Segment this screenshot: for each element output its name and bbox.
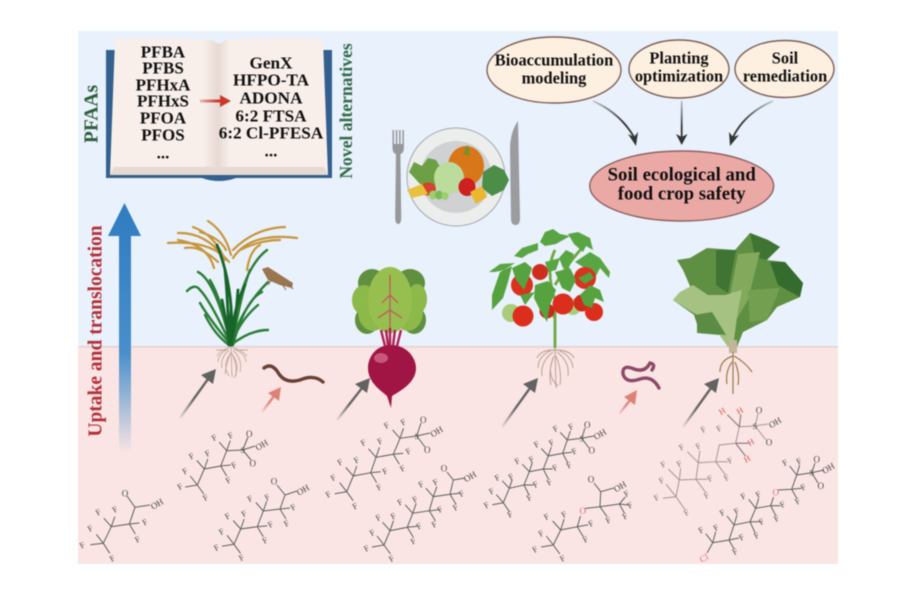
pepper — [458, 178, 476, 196]
icon: knife — [510, 121, 520, 225]
left page — [110, 39, 219, 175]
right page — [219, 39, 328, 175]
plant: tomato — [489, 229, 610, 388]
tomato stem — [542, 245, 585, 348]
tomato foliage back — [489, 229, 610, 278]
arrow: to beet — [337, 378, 370, 420]
molecule: 6:2 Cl-PFESA: Cl — [698, 551, 711, 564]
molecule: PFOA: FFFFFFFFFFFFFFF — [362, 476, 466, 564]
tomato foliage front — [492, 262, 604, 322]
molecule: PFOS: O — [584, 420, 591, 430]
label: Novel alternatives: Novel alternatives — [336, 43, 356, 179]
molecule: 6:2 FTSA: O — [766, 438, 773, 448]
rice panicles — [168, 221, 297, 270]
arrow: to tomato — [502, 378, 538, 427]
molecule: PFHxA-type acid: FFFFFFFFFFF — [212, 491, 298, 563]
molecule: HFPO-DA (GenX): O — [588, 474, 595, 484]
rice roots — [216, 347, 248, 378]
tomato fruits — [532, 264, 548, 280]
list: PFAAs compounds — [136, 42, 191, 162]
beet leaves — [358, 269, 386, 297]
molecule: PFBS: OH — [254, 437, 270, 453]
beet root — [368, 345, 416, 408]
molecule: PFOA: O — [441, 463, 448, 473]
molecule: 6:2 Cl-PFESA: OH — [820, 460, 837, 476]
arrow: to rice — [180, 369, 216, 418]
molecule: 6:2 Cl-PFESA: O — [772, 487, 779, 497]
lettuce roots — [720, 352, 752, 394]
molecule: 6:2 FTSA: O — [756, 406, 763, 416]
panel: sky background — [78, 31, 838, 347]
tomato roots — [537, 348, 574, 388]
list: PFAAs compounds: PFHxS — [137, 92, 189, 110]
beet stems — [381, 328, 401, 346]
oval: Bioaccumulation modeling: Bioaccumulation — [495, 50, 613, 70]
molecule: PFBA: O — [122, 488, 129, 498]
oval: Soil remediation — [735, 40, 834, 98]
molecule: 6:2 FTSA — [652, 405, 784, 518]
molecule: PFBS: O — [246, 429, 253, 439]
molecule: PFBA: OH — [149, 496, 166, 512]
arrow: PFAAs to alternatives — [200, 95, 231, 107]
plant: rice — [168, 221, 297, 378]
arrow: remediation to safety — [729, 101, 773, 146]
molecule: PFHxS: FFFFFFFFFFFFF — [324, 416, 413, 511]
rice leaves — [187, 250, 268, 345]
oval: Planting optimization: Planting — [649, 48, 709, 68]
arrow: planting to safety — [676, 101, 688, 145]
list: novel alternatives: 6:2 Cl-PFESA — [219, 124, 324, 142]
list: PFAAs compounds: PFOA — [140, 108, 187, 128]
tomato — [420, 182, 436, 196]
molecule: 6:2 Cl-PFESA: FFFFFFFFFFFFFFFF — [696, 455, 808, 557]
list: PFAAs compounds: PFBA — [141, 42, 186, 62]
molecule: PFBS: S — [240, 445, 245, 455]
icon: fork — [392, 130, 404, 224]
molecule: 6:2 FTSA: FFFFFFFFFFFFF — [652, 423, 735, 518]
oval: Soil ecological and food crop safety: Soil ecological and — [608, 164, 756, 186]
list: novel alternatives: ... — [265, 142, 277, 160]
list: novel alternatives — [219, 54, 324, 160]
oval: Bioaccumulation modeling — [487, 37, 621, 103]
oval: Planting optimization — [629, 40, 729, 98]
molecule: 6:2 Cl-PFESA: O — [813, 454, 820, 464]
icon: grasshopper — [262, 267, 293, 290]
molecule: HFPO-DA (GenX): FFFFFFFFFFF — [530, 488, 635, 564]
molecule: PFHxS: S — [414, 431, 419, 441]
arrow: to lettuce — [683, 378, 719, 427]
molecule: 6:2 FTSA: S — [753, 421, 758, 431]
molecule: HFPO-DA (GenX): OH — [612, 479, 629, 494]
molecule: PFHxS: O — [424, 445, 431, 455]
icon: open book with compound lists — [106, 39, 332, 181]
lettuce outer leaves — [673, 233, 803, 347]
molecule: 6:2 FTSA: OH — [767, 415, 784, 430]
list: PFAAs compounds: PFBS — [142, 58, 184, 78]
arrow: modeling to safety — [593, 101, 638, 146]
label: Uptake and translocation: Uptake and translocation — [86, 225, 106, 437]
list: novel alternatives: 6:2 FTSA — [235, 106, 307, 126]
molecule: PFOS: FFFFFFFFFFFFFFFFF — [482, 421, 579, 520]
icon: nematode — [623, 363, 659, 388]
molecule: PFHxS: OH — [429, 424, 445, 439]
panel: soil background — [78, 347, 838, 564]
oval: Soil remediation: remediation — [743, 66, 827, 86]
arrow: to earthworm — [262, 387, 281, 412]
molecule: 6:2 Cl-PFESA: O — [817, 481, 824, 491]
soil surface line — [78, 346, 838, 348]
molecule: PFHxA-type acid: OH — [295, 482, 312, 498]
molecule: PFHxA-type acid: O — [271, 477, 278, 487]
molecule: PFBA: FFFFFFF — [78, 504, 150, 564]
lettuce stalk — [729, 340, 737, 353]
oval: Bioaccumulation modeling: modeling — [522, 68, 587, 88]
oval: Soil remediation: Soil — [772, 48, 799, 68]
molecule: 6:2 Cl-PFESA: S — [809, 468, 814, 478]
list: novel alternatives: GenX — [250, 54, 293, 72]
molecule: PFOS: OH — [592, 426, 609, 442]
oval: Soil ecological and food crop safety: food crop safety — [618, 184, 746, 204]
cucumbers — [429, 190, 437, 200]
molecule: PFBS: O — [249, 458, 256, 468]
label: PFAAs: PFAAs — [82, 85, 102, 143]
oval: Planting optimization: optimization — [635, 66, 723, 86]
molecule: PFBS — [175, 429, 270, 503]
arrow: upward blue uptake arrow — [108, 203, 141, 453]
list: PFAAs compounds: PFOS — [141, 126, 185, 144]
molecule: PFHxS: O — [420, 415, 427, 425]
molecule: PFOS: S — [579, 433, 584, 443]
yellow vegetables — [407, 184, 428, 198]
pumpkin — [448, 146, 484, 186]
molecule: 6:2 FTSA: HHHH — [717, 405, 756, 465]
book cover — [106, 50, 332, 181]
molecule: PFOS: O — [588, 446, 595, 456]
arrow: to nematode — [619, 390, 637, 414]
list: novel alternatives: ADONA — [239, 88, 303, 108]
oval: Soil ecological and food crop safety — [590, 151, 774, 221]
list: novel alternatives: HFPO-TA — [233, 70, 310, 90]
molecule: PFOA: OH — [462, 469, 479, 484]
molecule: HFPO-DA (GenX): O — [579, 506, 586, 516]
cabbage — [434, 162, 464, 194]
plant: beet — [352, 267, 427, 408]
plant: lettuce — [673, 233, 803, 394]
icon: plate of vegetables — [407, 128, 509, 226]
left leaves — [409, 158, 442, 186]
icon: earthworm — [264, 366, 323, 382]
molecule: PFBS: FFFFFFFFF — [175, 430, 239, 503]
lettuce inner pale leaves — [673, 285, 742, 347]
right greens — [482, 165, 509, 196]
list: PFAAs compounds: PFHxA — [136, 76, 191, 94]
list: PFAAs compounds: ... — [157, 144, 169, 162]
molecule: PFBA — [78, 488, 166, 564]
